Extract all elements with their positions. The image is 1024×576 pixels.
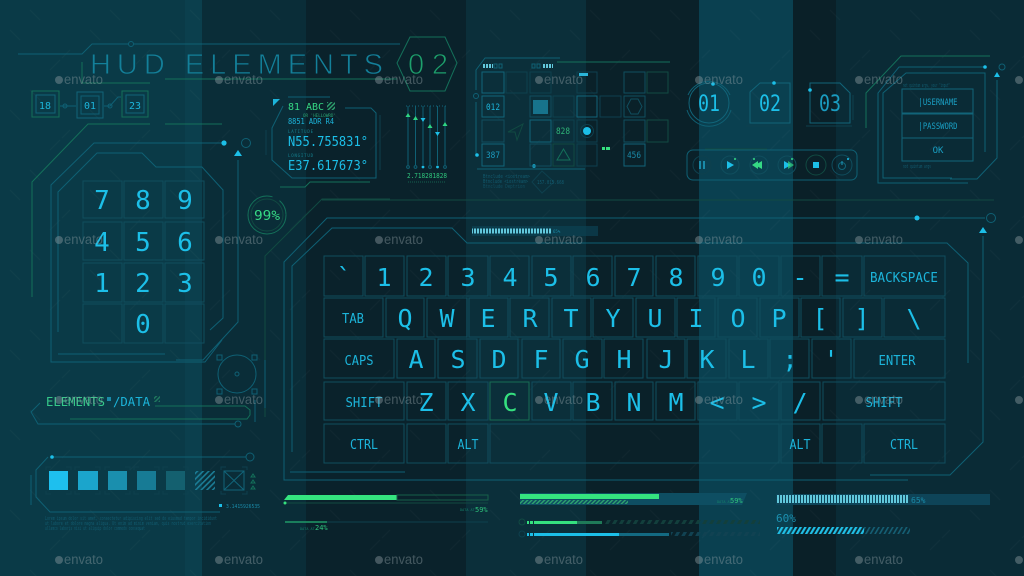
row 1 keys: BACKSPACE — [870, 271, 938, 286]
row 2 keys: [ — [812, 304, 828, 333]
row 1 keys: 4 — [502, 263, 518, 292]
login panel: not quintum argv, your "input" — [903, 83, 950, 89]
date boxes: 23 — [129, 101, 141, 112]
data grid panel: Btnclude <iostream> — [483, 174, 530, 180]
date boxes — [32, 91, 148, 118]
number badges — [687, 81, 853, 126]
elements data label: ELEMENTS — [46, 395, 105, 409]
row 2 keys — [324, 298, 945, 337]
watermarks: envato — [224, 232, 263, 247]
watermarks: envato — [544, 72, 583, 87]
row 2 keys: U — [647, 304, 663, 333]
watermarks: envato — [384, 72, 423, 87]
data grid panel: 387 — [486, 151, 500, 161]
row 1 keys: 1 — [376, 263, 392, 292]
login panel: |USERNAME — [918, 98, 958, 108]
row 4 keys: V — [543, 388, 559, 417]
coordinates panel: LATITUDE — [288, 129, 314, 134]
row 5 keys: CTRL — [350, 438, 378, 453]
watermarks: envato — [864, 392, 903, 407]
progress bar 24 percent: DATA AT — [300, 527, 316, 531]
watermarks: envato — [864, 232, 903, 247]
numpad frame — [32, 124, 250, 362]
row 2 keys: ] — [854, 304, 870, 333]
date boxes: 18 — [39, 101, 51, 112]
progress bar 59 percent green: 59% — [475, 506, 488, 514]
row 1 keys: ` — [336, 263, 352, 292]
lorem text: ut labore et dolore magna aliqua. Ut enim ad minim veniam, quis nostrud exercitation — [45, 521, 211, 527]
watermarks: envato — [544, 552, 583, 567]
watermarks: envato — [704, 552, 743, 567]
lorem text — [45, 516, 217, 532]
badge 03: 03 — [819, 92, 841, 117]
row 1 keys — [324, 256, 945, 296]
watermarks: envato — [384, 232, 423, 247]
numpad: 7 — [94, 186, 110, 216]
numpad: 0 — [135, 310, 151, 340]
row 5 keys: CTRL — [890, 438, 918, 453]
row 2 keys: TAB — [342, 312, 364, 327]
row 3 keys: A — [408, 345, 424, 374]
coordinates panel: E37.617673° — [288, 159, 368, 174]
row 4 keys: SHIFT — [346, 396, 383, 411]
progress bar 60 percent: 60% — [776, 512, 796, 525]
row 2 keys: W — [439, 304, 455, 333]
row 2 keys: Y — [605, 304, 621, 333]
coordinates panel: 8851 ADR R4 — [288, 117, 334, 126]
progress bar 24 percent — [285, 522, 488, 532]
date boxes: 01 — [84, 101, 96, 112]
row 2 keys: \ — [906, 304, 922, 333]
row 3 keys: J — [658, 345, 674, 374]
row 2 keys: I — [688, 304, 704, 333]
watermarks: envato — [224, 392, 263, 407]
progress bar 65 percent — [776, 494, 990, 505]
numpad: 9 — [177, 186, 193, 216]
hexagon badge 02 — [397, 37, 457, 91]
row 3 keys — [324, 339, 945, 378]
sliders: 2.718281828 — [407, 172, 447, 180]
99 percent gauge — [248, 196, 286, 234]
data grid panel: Btnclude Deptrion — [483, 184, 525, 190]
row 1 keys: 2 — [418, 263, 434, 292]
row 3 keys: ' — [823, 345, 839, 374]
row 4 keys: SHIFT — [866, 396, 903, 411]
numpad — [83, 181, 204, 343]
row 2 keys: R — [522, 304, 538, 333]
small progress bar in keyboard frame: 65% — [553, 229, 561, 234]
row 2 keys: P — [771, 304, 787, 333]
watermarks: envato — [64, 392, 103, 407]
row 1 keys: 8 — [668, 263, 684, 292]
progress bar 59 percent green: DATA AT — [460, 508, 476, 512]
media controls — [687, 149, 857, 180]
watermarks: envato — [544, 232, 583, 247]
row 2 keys: E — [480, 304, 496, 333]
row 1 keys: 0 — [751, 263, 767, 292]
coordinates panel: LONGITUD — [288, 153, 314, 158]
row 3 keys: D — [491, 345, 507, 374]
row 3 keys: L — [740, 345, 756, 374]
login panel: not quintum argv — [903, 164, 931, 170]
row 3 keys: K — [699, 345, 715, 374]
row 2 keys: T — [563, 304, 579, 333]
progress bar blue dashed — [519, 531, 760, 537]
row 3 keys: S — [450, 345, 466, 374]
progress bar 59 percent track — [520, 493, 747, 505]
lorem text: Lorem ipsum dolor sit amet, consectetur adipiscing elit sed do eiusmod tempor incididunt — [45, 516, 217, 522]
elements data label — [31, 395, 250, 427]
elements data label: /DATA — [113, 395, 151, 409]
progress bar 24 percent: 24% — [315, 524, 328, 532]
watermarks: envato — [864, 552, 903, 567]
progress bar 59 percent track: 59% — [730, 497, 743, 505]
numpad: 3 — [177, 269, 193, 299]
row 3 keys: F — [533, 345, 549, 374]
99 percent gauge: 99% — [254, 209, 280, 224]
coordinates panel: OR 'HELLOWRD' — [303, 113, 336, 119]
small progress bar in keyboard frame — [472, 226, 598, 236]
data grid panel: 456 — [627, 151, 641, 161]
login panel: OK — [933, 146, 944, 156]
row 4 keys: N — [626, 388, 642, 417]
row 4 keys: / — [792, 388, 808, 417]
data grid panel: Btnclude <iostream> — [483, 179, 528, 185]
round dial — [217, 355, 265, 422]
title: HUD ELEMENTS — [90, 49, 383, 81]
watermarks: envato — [224, 552, 263, 567]
watermarks: envato — [704, 72, 743, 87]
data grid panel: 828 — [556, 127, 570, 137]
sliders — [406, 106, 448, 182]
numpad: 6 — [177, 228, 193, 258]
row 1 keys: 7 — [626, 263, 642, 292]
watermarks: envato — [384, 552, 423, 567]
row 4 keys: < — [709, 388, 725, 417]
row 4 keys: Z — [418, 388, 434, 417]
watermarks: envato — [544, 392, 583, 407]
watermarks: envato — [704, 232, 743, 247]
login panel — [866, 56, 1005, 183]
row 5 keys — [324, 424, 945, 463]
watermarks: envato — [224, 72, 263, 87]
row 3 keys: CAPS — [344, 354, 374, 369]
watermarks: envato — [64, 552, 103, 567]
data grid panel: 157.015.668 — [537, 180, 564, 186]
row 4 keys: M — [668, 388, 684, 417]
data grid panel: 012 — [486, 103, 500, 113]
row 3 keys: ; — [782, 345, 798, 374]
progress bar green dashed — [519, 519, 760, 525]
progress bar 59 percent track: DATA AT — [717, 500, 733, 504]
watermarks: envato — [384, 392, 423, 407]
watermarks: envato — [64, 232, 103, 247]
badge 01: 01 — [698, 92, 720, 117]
row 4 keys: B — [585, 388, 601, 417]
keyboard — [324, 256, 945, 463]
keyboard frame — [265, 199, 996, 480]
numpad: 1 — [94, 269, 110, 299]
row 4 keys — [324, 382, 945, 420]
progress bar 60 percent — [776, 512, 910, 534]
numpad: 5 — [135, 228, 151, 258]
hexagon badge 02: 02 — [408, 49, 448, 81]
badge 02: 02 — [759, 92, 781, 117]
coordinates panel: 81 ABC — [288, 102, 324, 113]
numpad: 4 — [94, 228, 110, 258]
row 3 keys: ENTER — [878, 354, 916, 369]
row 4 keys: X — [460, 388, 476, 417]
row 2 keys: O — [730, 304, 746, 333]
lorem text: ullamco laboris nisi ut aliquip dolor commodo consequat — [45, 526, 145, 532]
badge 01 — [687, 81, 731, 126]
row 4 keys: C — [502, 388, 518, 417]
coordinates panel — [266, 97, 380, 187]
numpad: 8 — [135, 186, 151, 216]
row 1 keys: 3 — [460, 263, 476, 292]
row 5 keys: ALT — [790, 438, 811, 453]
row 2 keys: Q — [397, 304, 413, 333]
login panel: |PASSWORD — [918, 122, 958, 132]
row 1 keys: = — [834, 263, 850, 292]
row 1 keys: 6 — [585, 263, 601, 292]
row 3 keys: H — [616, 345, 632, 374]
row 1 keys: - — [792, 263, 808, 292]
row 1 keys: 9 — [710, 263, 726, 292]
row 5 keys: ALT — [458, 438, 479, 453]
row 3 keys: G — [574, 345, 590, 374]
row 4 keys: > — [751, 388, 767, 417]
badge 02 — [746, 81, 792, 126]
title — [18, 37, 457, 91]
watermarks: envato — [864, 72, 903, 87]
row 1 keys: 5 — [543, 263, 559, 292]
progress bar 59 percent green — [284, 495, 488, 514]
data grid panel — [474, 58, 670, 193]
watermarks: envato — [704, 392, 743, 407]
coordinates panel: N55.755831° — [288, 135, 368, 150]
colour swatch panel: 3.1415926535 — [226, 504, 260, 510]
colour swatch panel — [31, 453, 260, 532]
badge 03 — [806, 83, 853, 126]
numpad: 2 — [135, 269, 151, 299]
watermarks: envato — [64, 72, 103, 87]
progress bar 65 percent: 65% — [911, 496, 926, 505]
